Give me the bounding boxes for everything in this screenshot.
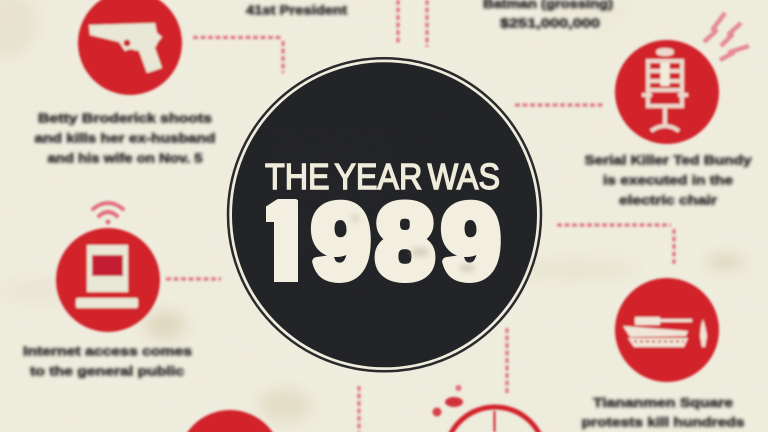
stains on numerals: [351, 214, 475, 272]
event: Internet access: [56, 203, 160, 332]
caption: Internet access: [23, 344, 192, 378]
heading: THE YEAR WAS: THE YEAR WAS: [265, 156, 500, 197]
central badge: [228, 58, 541, 371]
icon: red circle bottom left: [178, 410, 282, 432]
caption: Internet access: Internet access comes: [23, 344, 192, 358]
heading: 1989: 9: [312, 184, 370, 300]
caption: Tiananmen Square: Tiananmen Square: [593, 395, 733, 410]
heading: 1989: [266, 199, 501, 283]
caption: Betty Broderick: and his wife on Nov. 5: [48, 150, 202, 166]
caption: 41st President: 41st President: [246, 2, 348, 18]
event: Tiananmen Square: [615, 278, 719, 382]
icon: tank and man in red circle: [615, 278, 719, 382]
icon: target with blood splatter: [432, 385, 545, 432]
caption: Tiananmen Square: [582, 395, 744, 430]
connector dashes: [166, 0, 674, 432]
icon: electric chair in red circle: [615, 40, 719, 144]
heading: 1989: 8: [376, 184, 434, 300]
icon: electricity bolts: [704, 13, 749, 60]
icon: pistol in red circle: [78, 0, 182, 95]
caption: Tiananmen Square: protests kill hundreds: [582, 414, 744, 430]
heading: 1989: 9: [442, 184, 500, 300]
caption: Ted Bundy: Serial Killer Ted Bundy: [584, 152, 752, 168]
caption: Betty Broderick: [34, 110, 216, 166]
caption: Batman gross: [483, 0, 613, 30]
caption: Betty Broderick: and kills her ex-husband: [34, 130, 216, 146]
badge: dark circle with double ring: [228, 58, 541, 371]
caption: Batman gross: $251,000,000: [500, 16, 600, 30]
heading: 1989: 1: [255, 184, 313, 301]
caption: Ted Bundy: electric chair: [619, 192, 717, 208]
caption: Internet access: to the general public: [30, 364, 184, 378]
event: Ted Bundy: [615, 13, 749, 144]
event: Betty Broderick: [78, 0, 182, 95]
caption: Ted Bundy: is executed in the: [603, 172, 733, 188]
icon: computer in red circle: [56, 228, 160, 332]
icon: wifi signal: [93, 203, 123, 224]
caption: Betty Broderick: Betty Broderick shoots: [38, 110, 212, 126]
caption: Ted Bundy: [584, 152, 752, 208]
